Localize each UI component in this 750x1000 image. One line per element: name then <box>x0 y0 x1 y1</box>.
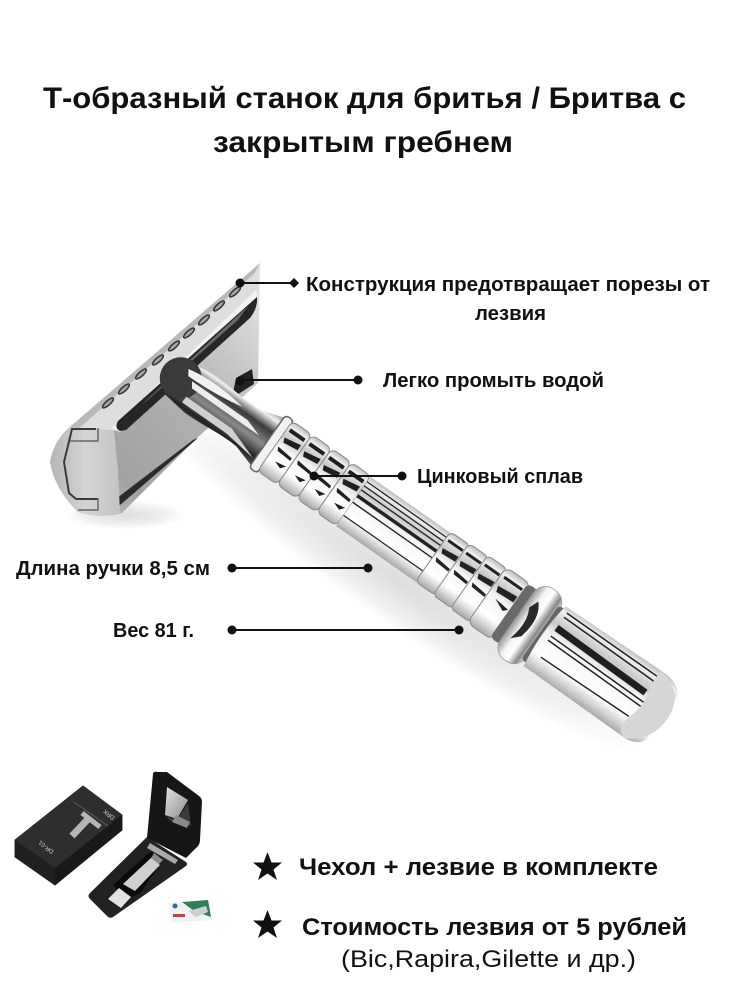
callout: rinse: Легко промыть водой <box>383 370 604 392</box>
cardboard box: DR-01 <box>37 838 55 854</box>
front face <box>50 427 120 516</box>
callout: weight <box>113 620 464 642</box>
lower knurl <box>413 529 531 640</box>
feature: case and blade included: Чехол + лезвие в комплекте <box>299 854 658 881</box>
callout: guard <box>236 274 710 325</box>
title: Т-образный станок для бритья / Бритва с <box>43 82 686 115</box>
callout: handle length: Длина ручки 8,5 см <box>16 558 210 580</box>
package photo <box>15 772 212 923</box>
title <box>43 82 686 159</box>
rinse opening <box>232 369 254 398</box>
neck <box>156 350 294 473</box>
callout: rinse <box>236 370 604 392</box>
razor handle <box>138 333 691 756</box>
collar <box>490 583 539 645</box>
cardboard box <box>15 786 122 885</box>
cap end face <box>617 670 688 752</box>
star bullet 2 <box>253 910 282 938</box>
callout: guard: лезвия <box>475 303 546 325</box>
lower blade slot <box>116 438 198 505</box>
open case base <box>88 837 187 918</box>
upper knurl <box>257 421 371 526</box>
razor photo illustration <box>50 263 691 783</box>
comb teeth of guard <box>101 286 242 409</box>
ring before knurl <box>249 415 294 473</box>
razor head <box>50 263 260 529</box>
feature: blade cost: Стоимость лезвия от 5 рублей <box>302 914 687 941</box>
callout: zinc alloy: Цинковый сплав <box>417 466 583 488</box>
callout: zinc alloy <box>310 466 583 488</box>
cardboard box: DRK <box>103 808 116 820</box>
upper blade slot <box>116 297 257 431</box>
callout: guard: Конструкция предотвращает порезы от <box>306 274 710 296</box>
razor shadow <box>138 381 662 783</box>
feature: blade cost: (Bic,Rapira,Gilette и др.) <box>341 946 636 973</box>
small razor in case <box>108 843 178 908</box>
fluted section <box>336 477 451 582</box>
blade pack <box>168 900 212 923</box>
open case lid <box>147 772 202 858</box>
title: закрытым гребнем <box>213 126 513 159</box>
cap <box>521 603 684 749</box>
star bullet 1 <box>253 852 282 880</box>
feature: blade cost <box>302 914 687 973</box>
callout: weight: Вес 81 г. <box>113 620 194 642</box>
callout: handle length <box>16 558 372 580</box>
